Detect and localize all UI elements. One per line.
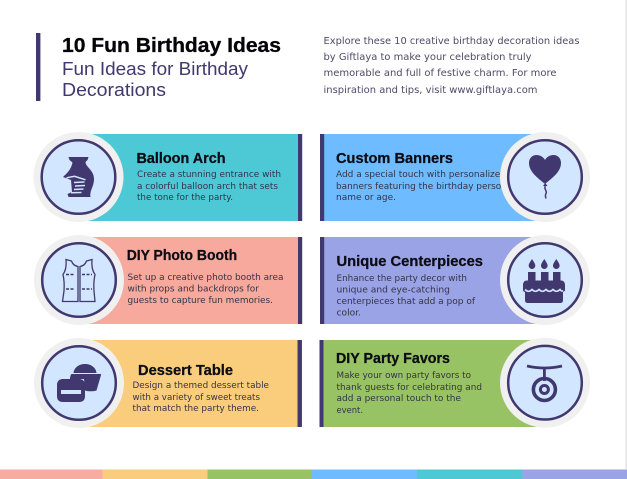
panel: Custom Banners xyxy=(320,132,590,222)
body text: DIY Party Favors: add a personal touch to the xyxy=(336,394,461,404)
body text: Balloon Arch: the tone for the party. xyxy=(137,193,233,203)
body text: Unique Centerpieces xyxy=(336,274,476,318)
heading: Custom Banners: Custom Banners xyxy=(336,151,453,167)
body text: Unique Centerpieces: color. xyxy=(336,308,361,318)
panel: DIY Party Favors xyxy=(320,338,590,428)
intro paragraph xyxy=(324,36,580,96)
panel: Balloon Arch xyxy=(34,132,302,222)
body text: Custom Banners: name or age. xyxy=(336,193,396,203)
body text: Balloon Arch xyxy=(137,170,281,203)
heading: Dessert Table: Dessert Table xyxy=(138,363,233,379)
title: 10 Fun Birthday Ideas xyxy=(62,34,281,57)
body text: Custom Banners: banners featuring the birthday person's xyxy=(336,182,514,192)
body text: DIY Party Favors: event. xyxy=(336,406,363,416)
body text: DIY Photo Booth: guests to capture fun memories. xyxy=(128,296,273,306)
body text: Dessert Table: that match the party theme. xyxy=(132,404,259,414)
body text: Unique Centerpieces: Enhance the party decor with xyxy=(336,274,467,284)
body text: DIY Photo Booth: with props and backdrops for xyxy=(128,284,259,294)
body text: Unique Centerpieces: centerpieces that add a pop of xyxy=(336,297,476,307)
subtitle: Decorations xyxy=(62,80,166,100)
panel: Dessert Table xyxy=(34,338,302,428)
body text: DIY Photo Booth: Set up a creative photo booth area xyxy=(128,273,284,283)
body text: Custom Banners: Add a special touch with personalized xyxy=(336,170,506,180)
footer colour strip xyxy=(0,470,627,479)
heading: DIY Party Favors: DIY Party Favors xyxy=(336,351,450,367)
intro paragraph: inspiration and tips, visit www.giftlaya.com xyxy=(324,85,538,96)
subtitle: Fun Ideas for Birthday xyxy=(62,59,248,79)
body text: Dessert Table: Design a themed dessert table xyxy=(132,381,269,391)
icon: vest xyxy=(34,235,124,325)
heading: Unique Centerpieces: Unique Centerpieces xyxy=(336,254,483,270)
header accent bar xyxy=(36,33,40,101)
icon: birthday cake xyxy=(500,235,590,325)
intro paragraph: by Giftlaya to make your celebration truly xyxy=(324,52,532,63)
intro paragraph: memorable and full of festive charm. For more xyxy=(324,68,556,79)
icon: heart balloon xyxy=(500,132,590,222)
body text: DIY Party Favors: Make your own party favors to xyxy=(336,371,471,381)
heading: Balloon Arch: Balloon Arch xyxy=(136,151,226,167)
body text: DIY Party Favors xyxy=(336,371,482,416)
body text: Balloon Arch: a colorful balloon arch that sets xyxy=(137,182,278,192)
icon: cupcake and macaron xyxy=(34,338,124,428)
body text: DIY Photo Booth xyxy=(128,273,284,306)
intro paragraph: Explore these 10 creative birthday decoration ideas xyxy=(324,36,580,47)
body text: Custom Banners xyxy=(336,170,514,203)
body text: Dessert Table xyxy=(132,381,269,414)
body text: Dessert Table: with a variety of sweet treats xyxy=(132,393,260,403)
icon: pendant ornament xyxy=(500,338,590,428)
subtitle xyxy=(62,59,248,100)
panel: DIY Photo Booth xyxy=(34,235,302,325)
body text: Unique Centerpieces: unique and eye-catching xyxy=(336,286,450,296)
body text: Balloon Arch: Create a stunning entrance with xyxy=(137,170,281,180)
body text: DIY Party Favors: thank guests for celebrating and xyxy=(336,383,482,393)
heading: DIY Photo Booth: DIY Photo Booth xyxy=(127,248,237,264)
panel: Unique Centerpieces xyxy=(320,235,590,325)
icon: vase with hand xyxy=(34,132,124,222)
